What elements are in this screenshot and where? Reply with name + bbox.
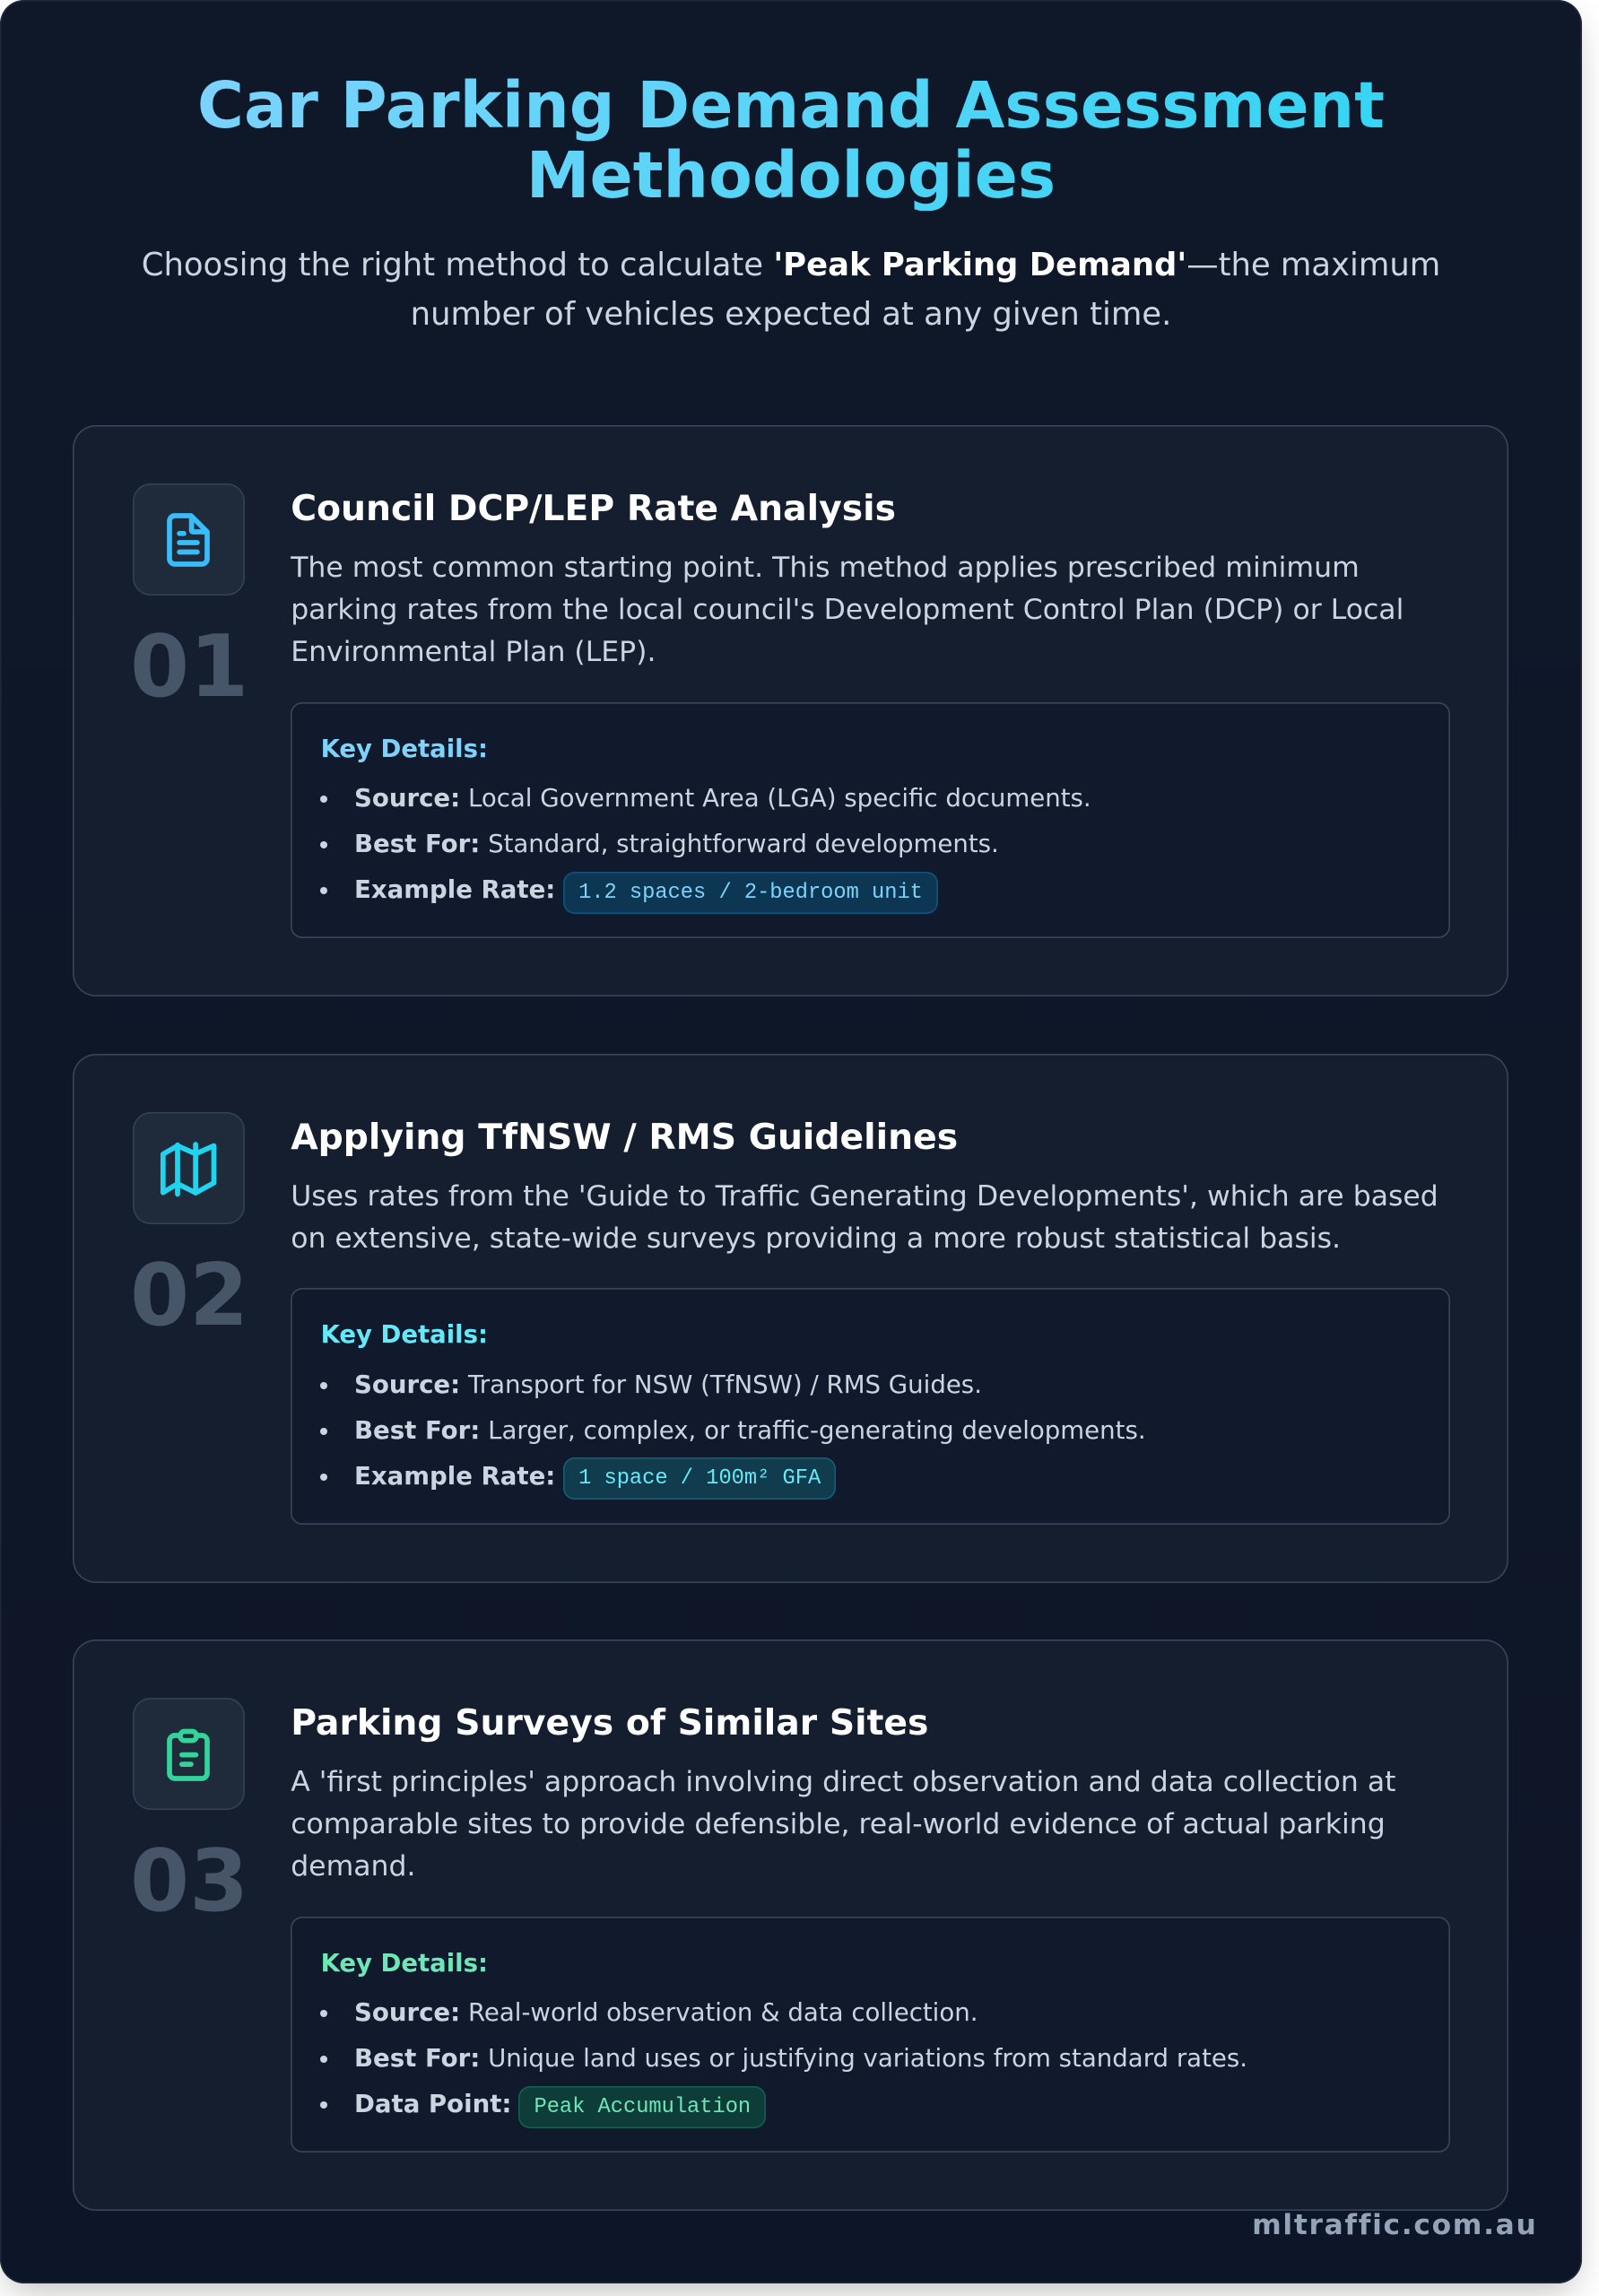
- description: [291, 1766, 1396, 1883]
- description: on extensive, state-wide surveys providing a more robust statistical basis.: [291, 1222, 1341, 1255]
- subtitle: number of vehicles expected at any given time.: [411, 296, 1171, 333]
- key details box: [291, 1288, 1450, 1525]
- panel: method 01 council rate analysis: [73, 425, 1508, 996]
- detail: data point: Data Point:: [354, 2089, 511, 2118]
- key details heading: Key Details:: [321, 735, 488, 763]
- heading: Parking Surveys of Similar Sites: [291, 1703, 928, 1744]
- description: demand.: [291, 1850, 416, 1883]
- icon: clipboard: [133, 1698, 245, 1810]
- website watermark: mltraffic.com.au: [1252, 2208, 1537, 2240]
- detail: example rate: 1 space / 100m² GFA: [578, 1466, 821, 1491]
- panel: method 03 parking surveys: [73, 1639, 1508, 2211]
- key details heading: Key Details:: [321, 1949, 488, 1978]
- detail: example rate: 1.2 spaces / 2-bedroom unit: [578, 881, 923, 905]
- detail: example rate: [320, 1457, 836, 1500]
- detail: source: Source: Transport for NSW (TfNSW) / RMS Guides.: [354, 1370, 982, 1399]
- subtitle: Choosing the right method to calculate 'Peak Parking Demand'—the maximum: [142, 247, 1440, 283]
- subtitle: [142, 247, 1440, 333]
- title: Car Parking Demand Assessment: [197, 68, 1385, 142]
- key details heading: Key Details:: [321, 1320, 488, 1349]
- detail: best for: Best For: Standard, straightforward developments.: [354, 829, 999, 858]
- description: parking rates from the local council's Development Control Plan (DCP) or Local: [291, 594, 1403, 626]
- detail: source: Source: Local Government Area (LGA) specific documents.: [354, 783, 1091, 813]
- step number 03: 03: [130, 1831, 248, 1930]
- detail: example rate: [320, 872, 938, 914]
- step number 01: 01: [130, 617, 248, 716]
- icon: map: [133, 1112, 245, 1224]
- description: [291, 1180, 1438, 1255]
- description: A 'first principles' approach involving direct observation and data collection at: [291, 1766, 1396, 1798]
- description: Environmental Plan (LEP).: [291, 636, 656, 668]
- detail: best for: Best For: Larger, complex, or traffic-generating developments.: [354, 1415, 1146, 1445]
- description: Uses rates from the 'Guide to Traffic Generating Developments', which are based: [291, 1180, 1438, 1213]
- description: The most common starting point. This method applies prescribed minimum: [291, 552, 1360, 584]
- detail: example rate: Example Rate:: [354, 874, 555, 904]
- detail: source: Source: Real-world observation & data collection.: [354, 1997, 978, 2027]
- heading: Applying TfNSW / RMS Guidelines: [291, 1118, 958, 1158]
- key details box: [291, 1916, 1450, 2152]
- step number 02: 02: [130, 1247, 248, 1345]
- heading: Council DCP/LEP Rate Analysis: [291, 489, 896, 529]
- title: [197, 68, 1385, 212]
- detail: data point: Peak Accumulation: [534, 2095, 751, 2119]
- panel: method 02 TfNSW guidelines: [73, 1054, 1508, 1583]
- icon: document: [133, 483, 245, 596]
- detail: best for: Best For: Unique land uses or justifying variations from standard rates.: [354, 2043, 1247, 2073]
- detail: data point: [320, 2086, 766, 2128]
- title: Methodologies: [526, 138, 1056, 212]
- detail: example rate: Example Rate:: [354, 1461, 555, 1491]
- description: comparable sites to provide defensible, real-world evidence of actual parking: [291, 1808, 1386, 1840]
- key details box: [291, 701, 1450, 938]
- description: [291, 552, 1403, 668]
